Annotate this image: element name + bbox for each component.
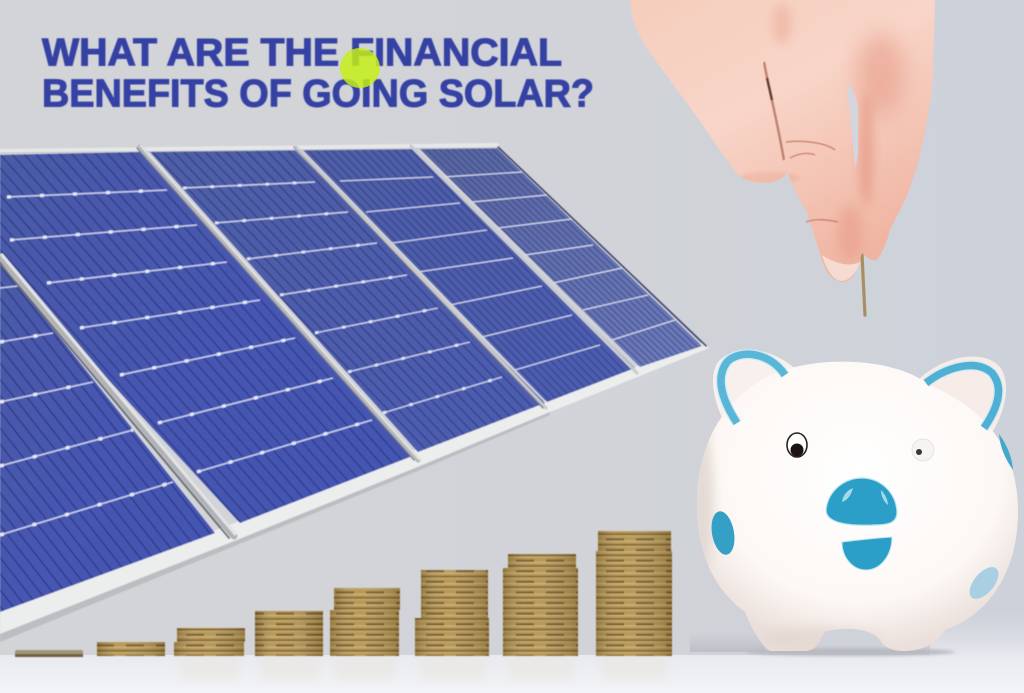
panel 1	[0, 265, 216, 612]
title	[42, 32, 594, 116]
title line 1: WHAT ARE THE FINANCIAL	[42, 32, 562, 74]
panel 5	[420, 148, 702, 368]
frame underside shadow	[0, 412, 550, 642]
icon: hand dropping coin	[630, 0, 935, 315]
gap between fingers	[847, 82, 858, 168]
panel 2	[0, 151, 411, 524]
coin stack 1	[15, 650, 83, 657]
floor glow at right	[930, 610, 1024, 655]
panel 3	[150, 150, 546, 452]
left ear stripe	[721, 354, 785, 423]
solar panel array	[0, 93, 709, 642]
panel frame bottom edge	[0, 343, 709, 634]
body shading	[697, 438, 854, 647]
left ear	[713, 350, 800, 428]
floor reflections	[180, 658, 668, 680]
lower right spot	[964, 562, 1004, 604]
knuckle lines	[786, 141, 838, 222]
coin stack 7	[503, 554, 578, 656]
title line 2: BENEFITS OF GOING SOLAR?	[42, 72, 594, 116]
hand	[630, 0, 935, 282]
finger shading	[740, 4, 904, 260]
coin stack 2	[97, 642, 165, 656]
coin stack 3	[174, 628, 245, 656]
left spot	[708, 509, 738, 557]
coin stack 6	[415, 570, 489, 656]
table surface	[0, 655, 1024, 693]
right ear stripe	[926, 366, 999, 428]
coin stack 5	[330, 588, 400, 656]
mouth	[842, 537, 892, 570]
piggy bank	[690, 350, 1018, 656]
coin stack 8	[596, 531, 672, 656]
snout highlights	[842, 488, 888, 505]
green dot	[340, 48, 380, 88]
pig body	[697, 362, 1018, 651]
finger nail	[822, 255, 860, 281]
left eye	[787, 433, 807, 457]
right eye	[912, 439, 934, 461]
snout	[826, 478, 897, 525]
right side spot	[999, 434, 1013, 470]
right ear	[918, 357, 1006, 442]
finger crease	[764, 62, 784, 160]
panel 4	[303, 148, 636, 402]
panel rails	[0, 145, 706, 538]
coin stacks	[15, 531, 672, 680]
coin in fingers	[862, 255, 865, 315]
pig shadow	[690, 632, 955, 656]
coin stack 4	[255, 611, 323, 656]
